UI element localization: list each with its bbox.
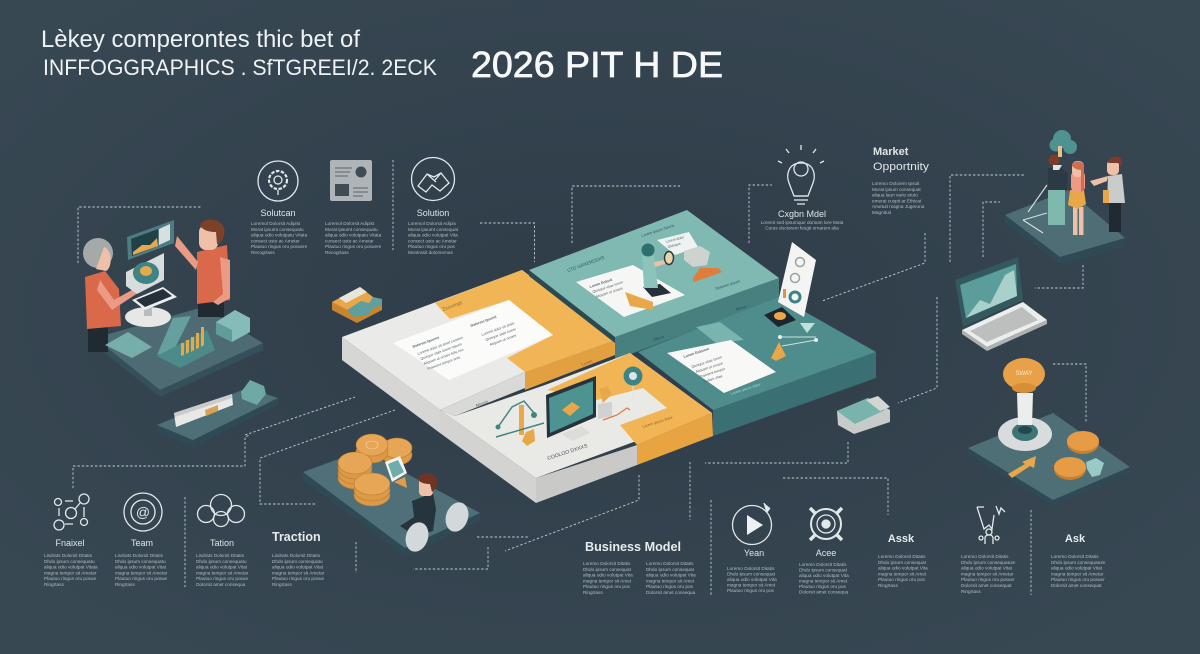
block: ask three: Dolorsit amet consequat: [1051, 583, 1102, 588]
block: market opportunity: aliqua lauri vario etuto: [872, 193, 918, 198]
block: solution text 1: Solutcan: [260, 208, 296, 218]
block: traction: Plautuo ringus oru posue: [272, 576, 325, 581]
block: ask two: Dhdo ipsum consequatum: [961, 560, 1016, 565]
block: acee: Acee: [816, 548, 836, 558]
block: ask one: magna tempor sit Amet: [878, 571, 927, 576]
panel: orange and white lower block: [440, 353, 713, 503]
panel: white and orange top block: [342, 270, 615, 433]
block: acee: [799, 548, 849, 594]
block: yean: aliqua odio volutpat Vita: [727, 577, 777, 582]
coins: [1054, 431, 1104, 480]
block: ask two: [961, 554, 1016, 594]
block: ask one: Plautuo ringus oru pos: [878, 577, 926, 582]
panel: dark teal block: [638, 242, 876, 436]
paper sheet: Quisque vitae lorem: [592, 280, 624, 294]
cash stack: [216, 310, 250, 342]
block: solution text 3: Plautuo ringus oru pos: [408, 244, 456, 249]
icon: play circle: [732, 503, 772, 544]
block: financial: magna tempor sit Ametar: [44, 570, 97, 575]
block: tation: magna tempor sit Ametar: [196, 570, 249, 575]
block: solution text 2: [325, 221, 382, 255]
illustration: joystick on platform: [968, 358, 1130, 506]
block: acee: Dhdo ipsum consequat: [799, 568, 848, 572]
tablet on stand: [125, 287, 177, 327]
block: team: Team: [131, 538, 153, 548]
paper sheet: Aliquam ut ornare: [695, 361, 723, 374]
block: yean: Loremo Dolorsit Ditatis: [727, 566, 775, 571]
title: [41, 26, 723, 85]
growth chart: [496, 401, 544, 446]
block: tation: [196, 538, 249, 587]
panel: light teal block: [529, 210, 779, 360]
block: ask two: Dolorsit amet consequat: [961, 583, 1012, 588]
block: solution text 1: Plautuo ringus oru posuere: [251, 244, 308, 249]
block: ask one: Ringrtass: [878, 583, 898, 588]
paper sheet: Aliquam ut ornare felis nec: [423, 348, 465, 366]
icon: at sign circle: @: [136, 504, 150, 520]
tab label: Zxcurinpt: [442, 300, 464, 313]
block: ask one: Assk: [888, 533, 915, 545]
icon: network nodes: [54, 494, 89, 530]
block: ask two: Plautuo ringus oru posuer: [961, 577, 1015, 582]
block: solution text 2: consect usto ac Ametar: [325, 238, 374, 243]
block: solution text 3: Loremol Dolorsit Adipis: [408, 221, 457, 226]
block: solution text 3: Montrasit dolorsemas: [408, 250, 453, 255]
platform: [303, 450, 480, 556]
block: traction: Ringrtass: [272, 582, 292, 587]
connector lines: [73, 160, 1086, 595]
panel: light teal block: Lorem ipsum dolorsi: [641, 224, 675, 238]
block: business model: Loremo Dolorsit Ditatis: [646, 561, 694, 566]
coin stacks: [338, 434, 412, 506]
block: model text: Cxgbn Mdel: [778, 209, 826, 219]
block: acee: magna tempor sit Amet: [799, 578, 848, 584]
illustration: laptop with chart: [955, 257, 1047, 351]
small note: Lorem dolor: [665, 235, 686, 244]
orange cone and network: [771, 323, 818, 361]
block: business model: aliqua odio volutpat Vita: [583, 573, 633, 578]
block: yean: Dhdo ipsum consequat: [727, 572, 776, 576]
block: solution text 1: [251, 208, 308, 255]
block: market opportunity: Market: [873, 146, 909, 158]
person two: [1068, 161, 1086, 235]
block: team: Plautuo ringus oru posue: [115, 576, 168, 581]
block: solution text 3: consect usto ac Ametar: [408, 238, 457, 243]
title: Lèkey comperontes thic bet of: [41, 26, 360, 53]
illustration: two people at dashboard: [83, 219, 263, 397]
block: solution text 2: Loremol Dolorsit Adipist: [325, 221, 375, 226]
block: team: Dhdo ipsum consequatu: [115, 559, 166, 564]
block: ask one: aliqua odio volutpat Vita: [878, 566, 928, 571]
block: business model: aliqua odio volutpat Vita: [646, 573, 696, 578]
block: acee: aliqua odio volutpat Vita: [799, 573, 849, 578]
block: financial: [44, 538, 98, 587]
paper sheet: Quisque vitae lorem mauris: [420, 342, 463, 361]
person three: [1090, 156, 1125, 232]
platform: [968, 413, 1130, 506]
illustration: small teal device: [837, 396, 890, 434]
block: tation: Dolorsit amet consequa: [196, 582, 246, 587]
chart screen: [127, 220, 174, 260]
block: yean: Plautuo ringus oru pos: [727, 588, 775, 593]
block: business model: magna tempor sit Amet: [646, 578, 695, 583]
block: traction: Traction: [272, 530, 321, 544]
joystick: [998, 358, 1052, 451]
icon: overlapping team circles: [198, 494, 244, 526]
presentation board: [778, 242, 816, 317]
panel: orange and white lower block: Lorem ipsum dolor: [642, 415, 674, 429]
paper sheet: Loremit dolor sit amet consect: [417, 336, 463, 356]
block: yean: [727, 548, 777, 593]
panel: light teal block: Dolorem ipsum: [715, 279, 741, 291]
illustration: server on platform: [157, 380, 278, 447]
illustration: orange device: [332, 287, 382, 323]
block: tation: Lisdrats Dolorsit Ditatis: [196, 553, 245, 558]
joystick: SWAY: [1015, 371, 1033, 377]
icon: target with crossed tools: [810, 508, 842, 540]
paper sheet: Nullam vitae: [703, 374, 723, 384]
platform: [1005, 185, 1125, 265]
panel: orange and white lower block: COOLOO DXXXS: [547, 443, 589, 462]
block: model text: [761, 209, 844, 230]
block: market opportunity: Morat ipsum consequat: [872, 187, 921, 192]
block: ask one: [878, 533, 928, 588]
block: solution text 3: Solution: [417, 208, 449, 218]
chart box: [157, 316, 215, 368]
block: tation: Dhdo ipsum consequatu: [196, 559, 247, 564]
block: ask one: Loremo Dolorsit Ditatis: [878, 554, 926, 559]
platform: [95, 307, 263, 397]
block: ask two: Ringrtass: [961, 589, 981, 594]
icon: handshake in circle: [412, 158, 454, 200]
block: team: [115, 538, 168, 587]
block: ask three: [1051, 533, 1106, 588]
block: solution text 1: aliqua odio volutpatu Vitata: [251, 233, 308, 238]
icon: gear in circle: [258, 161, 298, 201]
small note: [657, 232, 698, 255]
block: team: aliqua odio volutpat Vitat: [115, 565, 167, 570]
machine and orange pieces: [684, 246, 722, 282]
block: business model: Loremo Dolorsit Ditatis: [583, 561, 631, 566]
title: INFFOGGRAPHICS . SfTGREEI/2. 2ECK: [43, 55, 437, 80]
block: model text: Loremt sed ipsumque dorsum lore Mota: [761, 220, 844, 225]
seated person: [400, 473, 472, 555]
block: business model: Plautuo ringus oru pos: [583, 584, 631, 589]
block: ask three: magna tempor sit Ametar: [1051, 571, 1104, 576]
left person: [83, 238, 141, 352]
block: business model: [583, 540, 696, 595]
block: financial: Dhdo ipsum consequatu: [44, 559, 95, 564]
icon: medal and person: [977, 506, 1005, 544]
paper sheet: Lorem Dolorem: [683, 347, 710, 359]
block: financial: aliqua odio volutpat Vitata: [44, 565, 98, 570]
block: business model: Ringrtass: [583, 590, 603, 595]
tablet: [385, 456, 407, 488]
paper sheet: Quisque vitae lorem: [485, 327, 516, 342]
paper sheet: [576, 265, 685, 317]
block: ask three: Loremo Dolorsit Ditatis: [1051, 554, 1099, 559]
block: ask three: Plautuo ringus oru posuer: [1051, 577, 1105, 582]
notepad: [105, 332, 152, 358]
block: market opportunity: Magnituit: [872, 210, 892, 215]
paper sheet: [393, 300, 553, 380]
illustration: coins and person on platform: [303, 434, 480, 556]
title: 2026 PIT H DE: [471, 44, 723, 85]
block: market opportunity: emerat cuspit ar Ethicat: [872, 198, 922, 203]
block: model text: Curas ductorem feugit ornarem alia: [765, 226, 839, 230]
block: team: Ringrtass: [115, 582, 135, 587]
block: solution text 3: Morat ipsumt consequat: [408, 227, 459, 232]
block: financial: Fnaixel: [55, 538, 85, 548]
right person: [175, 219, 230, 317]
panel: orange and white lower block: Lorem: [581, 358, 594, 367]
block: solution text 3: aliqua odio volutpat Vita: [408, 233, 458, 238]
block: solution text 1: consect usto ac Ametar: [251, 238, 300, 243]
small note: Quisque: [667, 242, 681, 249]
block: market opportunity: [872, 146, 930, 215]
panel: dark teal block: Lorem ipsum dolor: [730, 382, 762, 396]
block: traction: Lisdrats Dolorsit Ditatis: [272, 553, 321, 558]
monitor: [546, 376, 596, 441]
paper sheet: Praesent tempor ante: [427, 355, 461, 371]
cloud icon: [1050, 130, 1077, 157]
seated person with magnifier: [625, 244, 674, 310]
panel: orange and white lower block: Ateaxis: [475, 399, 489, 408]
illustration: three people on platform: [1005, 130, 1125, 265]
paper sheet: Aliquam ut ornare: [489, 333, 517, 347]
block: yean: Yean: [744, 548, 764, 558]
block: ask three: Dhdo ipsum consequatum: [1051, 560, 1106, 565]
block: market opportunity: Opportnity: [873, 161, 930, 173]
block: traction: magna tempor sit Ametar: [272, 570, 325, 575]
block: ask three: Ask: [1065, 533, 1086, 545]
block: tation: Plautuo ringus oru posue: [196, 576, 249, 581]
paper sheet: [667, 340, 776, 393]
block: tation: aliqua odio volutpat Vitat: [196, 565, 248, 570]
note: [696, 322, 744, 343]
block: business model: Dolorsit amet consequa: [646, 590, 696, 595]
block: financial: Lisdrats Dolorsit Ditatis: [44, 553, 93, 558]
panel: dark teal block: Alexor: [653, 333, 666, 342]
block: traction: Dhdo ipsum consequatu: [272, 559, 323, 564]
block: business model: Dhdo ipsum consequat: [646, 567, 695, 572]
block: yean: magna tempor sit Amet: [727, 582, 776, 588]
block: solution text 1: Recogrtass: [251, 250, 275, 255]
pie screen: [126, 253, 164, 294]
block: financial: Plautuo ringus oru posue: [44, 576, 97, 581]
block: solution text 2: aliqua odio volutpatu Vitata: [325, 233, 382, 238]
block: market opportunity: Loremo Dolorem Ipsuit: [872, 181, 920, 186]
block: team: Lisdrats Dolorsit Ditatis: [115, 553, 164, 558]
paper sheet: Lorem Dolorit: [589, 278, 613, 289]
block: solution text 1: Loremol Dolorsit Adipist: [251, 221, 301, 226]
paper sheet: Praesent tempor: [699, 367, 726, 379]
icon: lightbulb: [778, 145, 824, 204]
block: acee: Plautuo ringus oru pos: [799, 584, 847, 589]
arrow: [1008, 456, 1036, 478]
block: ask one: Dhdo ipsum consequat: [878, 560, 927, 565]
paper sheet: Quisque vitae lorem: [691, 355, 723, 369]
block: solution text 3: [408, 208, 459, 255]
block: acee: Dolorsit amet consequa: [799, 590, 849, 594]
paper sheet: Dolorem Ipsumt: [470, 315, 498, 328]
block: solution text 2: Plautuo ringus oru posuere: [325, 244, 382, 249]
block: business model: magna tempor sit Amet: [583, 578, 632, 583]
block: ask two: Loremo Dolorsit Ditatis: [961, 554, 1009, 559]
person one: [1048, 154, 1068, 225]
block: business model: Business Model: [585, 540, 681, 554]
block: solution text 2: Morat ipsumt consequatu: [325, 227, 378, 232]
block: financial: Ringrtass: [44, 582, 64, 587]
paper sheet: Loremit dolor sit amet: [481, 321, 515, 337]
panel: light teal block: CTO GRXERDDXS: [567, 255, 605, 273]
block: business model: Dhdo ipsum consequat: [583, 567, 632, 572]
paper sheet: Dolorem Ipsums: [412, 336, 440, 349]
block: ask two: magna tempor sit Ametar: [961, 571, 1014, 576]
block: solution text 2: Recogrtass: [325, 250, 349, 255]
block: ask three: aliqua odio volutpat Vitat: [1051, 566, 1103, 571]
block: business model: Plautuo ringus oru pos: [646, 584, 694, 589]
block: team: magna tempor sit Ametar: [115, 570, 168, 575]
paper sheet: Aliquam ut ornare: [595, 286, 623, 299]
block: ask two: aliqua odio volutpat Vitat: [961, 566, 1013, 571]
panel: dark teal block: Alexor: [735, 303, 748, 312]
block: tation: Tation: [210, 538, 234, 548]
block: solution text 1: Morat ipsumt consequatu: [251, 227, 304, 232]
black device: [764, 307, 796, 327]
block: market opportunity: Ametuit magna Jugeruna: [872, 204, 925, 209]
icon: at sign circle: [124, 493, 162, 531]
block: traction: aliqua odio volutpat Vitat: [272, 565, 324, 570]
right side stack and pin: [598, 366, 642, 420]
block: acee: Loremo Dolorsit Ditatis: [799, 562, 847, 567]
icon: grey document card: [330, 160, 372, 201]
block: traction: [272, 530, 325, 587]
